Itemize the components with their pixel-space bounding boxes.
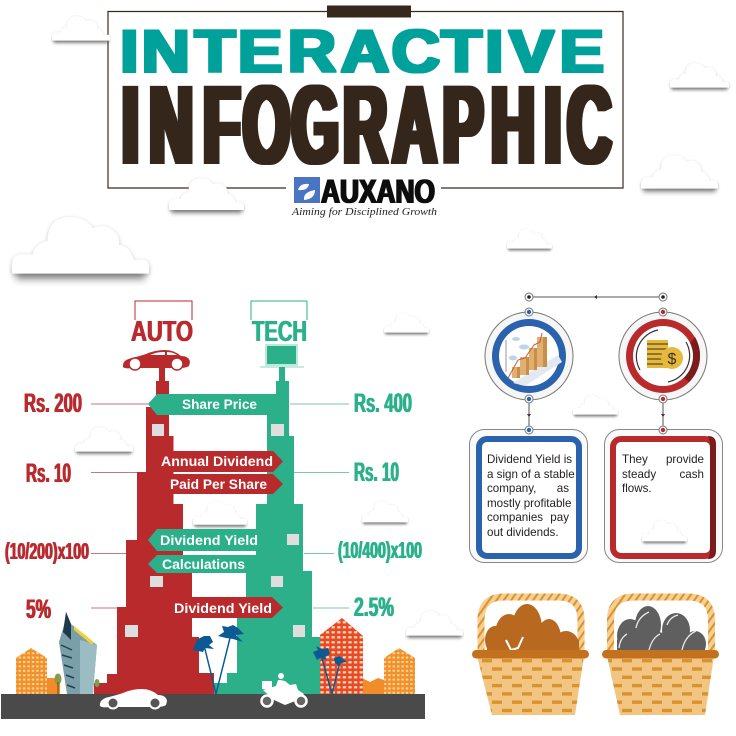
- city: red building: [320, 618, 363, 694]
- cloud: [12, 217, 149, 279]
- text: steady cash flows: steady cash: [622, 468, 704, 481]
- card: dividend yield: [470, 426, 588, 562]
- text: steady cash flows: [622, 453, 704, 495]
- heading: AUTO: AUTO: [131, 316, 193, 348]
- cloud: [406, 611, 463, 638]
- cloud: [641, 155, 718, 192]
- title: INFOGRAPHIC: INFOGRAPHIC: [122, 64, 611, 187]
- TECH heading box: [251, 301, 307, 320]
- text: steady cash flows: They provide: [622, 453, 704, 466]
- text: dividend yield explanation: out dividends.: [487, 526, 559, 539]
- icon: red car: [123, 350, 190, 370]
- text: dividend yield explanation: company, as: [487, 482, 569, 495]
- logo: Auxano: [291, 173, 437, 218]
- text: dividend yield explanation: companies pay: [487, 511, 569, 524]
- icon circle: coins: [619, 312, 707, 400]
- value: 2.5%: 2.5%: [354, 592, 394, 622]
- cloud: [52, 16, 110, 43]
- banner: Dividend Yield red: Dividend Yield: [174, 600, 272, 616]
- panel: connector diagram: [470, 293, 722, 562]
- palm trees: [193, 625, 347, 694]
- cloud: [169, 178, 244, 213]
- city: glass tower: [59, 612, 97, 694]
- icon circle: chart: [485, 312, 573, 400]
- eggs: [617, 606, 706, 657]
- handle: [481, 597, 581, 652]
- cloud: [670, 63, 729, 90]
- eggs: [485, 604, 579, 659]
- banner: Dividend Yield red: [174, 597, 283, 618]
- text: dividend yield explanation: [487, 453, 575, 539]
- banner: Share Price: Share Price: [182, 396, 257, 412]
- heading: TECH: TECH: [252, 316, 307, 348]
- value: Rs. 10: Rs. 10: [354, 457, 399, 487]
- tech values: [338, 388, 422, 622]
- cloud: [642, 520, 687, 543]
- city: orange building right: [384, 648, 415, 694]
- low orange buildings: [47, 678, 384, 694]
- banner: Calculations: [148, 555, 262, 573]
- cloud: [384, 313, 429, 335]
- cloud: [362, 501, 408, 524]
- basket: brown eggs: [472, 597, 589, 715]
- banner: Paid Per Share: [170, 474, 283, 494]
- rim: [472, 650, 589, 658]
- body: [607, 656, 714, 715]
- icon: white car: [100, 689, 167, 708]
- banner: Share Price: [148, 394, 276, 415]
- tower windows: [125, 424, 305, 637]
- text: dividend yield explanation: mostly profitable: [487, 497, 571, 510]
- text: dividend yield explanation: a sign of a stable: [487, 468, 575, 481]
- value: (10/400)x100: (10/400)x100: [338, 537, 422, 563]
- connector lines: [529, 297, 663, 430]
- value: (10/200)x100: (10/200)x100: [5, 538, 89, 564]
- cloud: [573, 395, 618, 417]
- cloud: [75, 427, 133, 454]
- value: 5%: 5%: [26, 594, 51, 624]
- value: Rs. 200: Rs. 200: [24, 388, 82, 418]
- text: dividend yield explanation: Dividend Yield is: [487, 453, 572, 466]
- banner: Annual Dividend: [161, 451, 283, 472]
- body: [477, 656, 584, 715]
- banner: Dividend Yield green: [148, 529, 262, 551]
- panel: tower comparison: [1, 301, 425, 719]
- handle: [610, 597, 712, 652]
- banner: Paid Per Share: Paid Per Share: [170, 476, 267, 492]
- auto values: [5, 388, 89, 624]
- logo tagline: Aiming for Disciplined Growth: [291, 207, 437, 218]
- AUTO heading box: [135, 301, 192, 320]
- logo wordmark: AUXANO: [321, 173, 435, 211]
- icon: logo leaves: [294, 177, 320, 203]
- red tower: [94, 367, 214, 695]
- banner: Dividend Yield green: Dividend Yield: [160, 532, 258, 548]
- green tower: [214, 367, 343, 695]
- card: steady cash flows: [604, 426, 722, 562]
- road: [1, 694, 425, 719]
- leader lines: [91, 404, 349, 608]
- title frame: [108, 6, 623, 188]
- rim: [602, 650, 719, 658]
- cloud: [193, 501, 247, 527]
- city: orange building left: [16, 648, 47, 694]
- banner: Calculations: Calculations: [162, 556, 245, 572]
- value: Rs. 10: Rs. 10: [26, 458, 71, 488]
- text: steady cash flows: flows.: [622, 482, 652, 495]
- icon circle: coins: $: [668, 351, 677, 368]
- city: small trees: [54, 674, 100, 694]
- connector nodes: [525, 293, 667, 417]
- icon: delivery motorbike: [262, 673, 306, 706]
- cloud: [507, 229, 552, 251]
- value: Rs. 400: Rs. 400: [354, 388, 412, 418]
- title: INTERACTIVE: INTERACTIVE: [120, 18, 604, 85]
- banner: Annual Dividend: Annual Dividend: [161, 453, 273, 469]
- icon: laptop: [260, 344, 304, 368]
- basket: grey eggs: [602, 597, 719, 715]
